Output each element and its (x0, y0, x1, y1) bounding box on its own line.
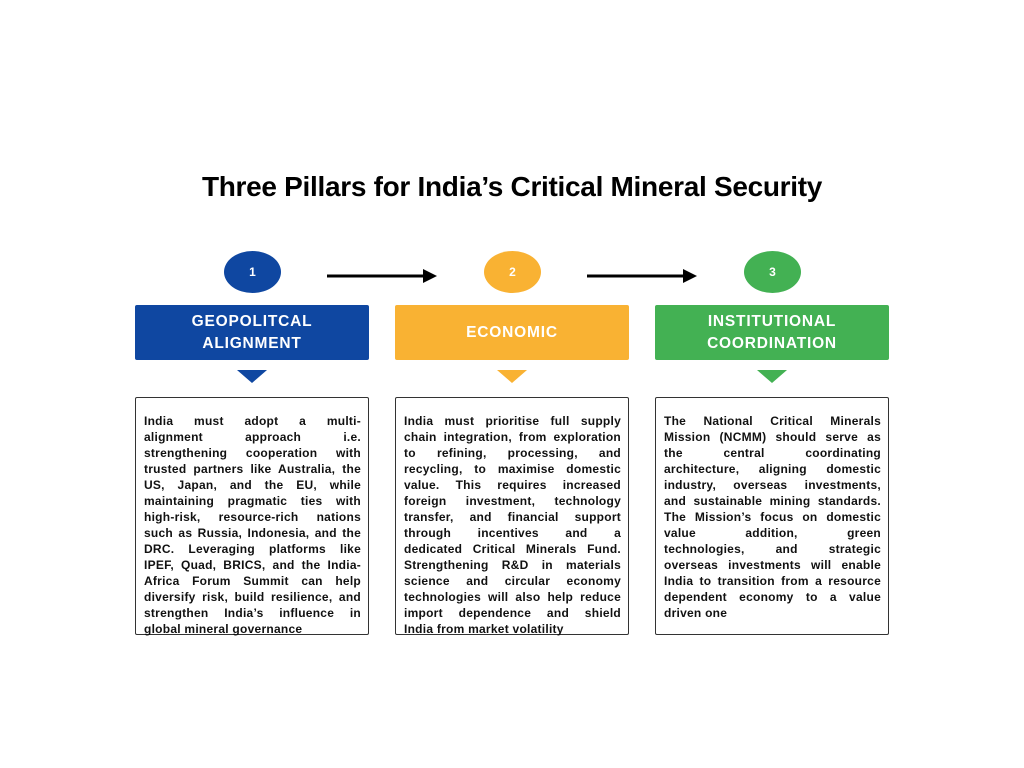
panel: economic text: India from market volatility (404, 622, 564, 636)
panel: institutional text: The Mission’s focus on domestic (664, 510, 881, 524)
panel: institutional text: driven one (664, 606, 727, 620)
panel: institutional text: architecture, aligning domestic (664, 462, 881, 476)
icon: number 2: 2 (509, 265, 516, 279)
panel: institutional text: value addition, green (664, 526, 881, 540)
panel: economic text: through incentives and a (404, 526, 621, 540)
panel: economic text (395, 397, 629, 635)
panel: economic text: chain integration, from exploration (404, 430, 621, 444)
panel: economic text: value. This requires increased (404, 478, 621, 492)
panel: institutional text: technologies, and strategic (664, 542, 881, 556)
panel: economic text: India must prioritise full supply (404, 414, 621, 428)
heading: geopolitical: GEOPOLITCAL (192, 312, 312, 330)
panel: economic text: Strengthening R&D in materials (404, 558, 621, 572)
panel: economic text: recycling, to maximise domestic (404, 462, 621, 476)
pointer 3 (757, 370, 787, 383)
icon: number 1 (224, 251, 281, 293)
panel: geopolitical text (135, 397, 369, 635)
panel: geopolitical text: global mineral governance (144, 622, 302, 636)
panel: institutional text (655, 397, 889, 635)
panel: institutional text: industry, overseas investments, (664, 478, 881, 492)
panel: economic text: foreign investment, technology (404, 494, 621, 508)
panel: economic text: science and circular economy (404, 574, 621, 588)
heading: institutional: COORDINATION (707, 334, 837, 352)
heading: economic: ECONOMIC (466, 324, 558, 340)
pointer 1 (237, 370, 267, 383)
panel: economic text: dedicated Critical Minerals Fund. (404, 542, 621, 556)
panel: institutional text: dependent economy to a value (664, 590, 881, 604)
icon: number 3: 3 (769, 265, 776, 279)
panel: geopolitical text: alignment approach i.e. (144, 430, 361, 444)
panel: geopolitical text: DRC. Leveraging platforms like (144, 542, 361, 556)
heading: institutional: INSTITUTIONAL (708, 312, 836, 330)
panel: geopolitical text: US, Japan, and the EU, while (144, 478, 361, 492)
icon: number 3 (744, 251, 801, 293)
panel: institutional text: Mission (NCMM) should serve as (664, 430, 881, 444)
panel: geopolitical text: high-risk, resource-rich nations (144, 510, 361, 524)
panel: geopolitical text: maintaining pragmatic ties with (144, 494, 361, 508)
pointer 2 (497, 370, 527, 383)
heading: institutional (655, 305, 889, 360)
panel: institutional text: the central coordinating (664, 446, 881, 460)
title: Three Pillars for India’s Critical Mineral Security (202, 171, 822, 202)
panel: economic text: technologies will also help reduce (404, 590, 621, 604)
panel: geopolitical text: such as Russia, Indonesia, and the (144, 526, 361, 540)
icon: number 2 (484, 251, 541, 293)
panel: institutional text: and sustainable mining standards. (664, 494, 881, 508)
panel: geopolitical text: strengthening cooperation with (144, 446, 361, 460)
heading: geopolitical (135, 305, 369, 360)
panel: institutional text: The National Critical Minerals (664, 414, 881, 428)
panel: geopolitical text: trusted partners like Australia, the (144, 462, 361, 476)
heading: economic (395, 305, 629, 360)
panel: geopolitical text: Africa Forum Summit can help (144, 574, 361, 588)
panel: economic text: to refining, processing, and (404, 446, 621, 460)
arrow 2 to 3 (587, 269, 697, 283)
icon: number 1: 1 (249, 265, 256, 279)
panel: geopolitical text: India must adopt a multi- (144, 414, 361, 428)
panel: geopolitical text: IPEF, Quad, BRICS, and the India- (144, 558, 361, 572)
arrow 1 to 2 (327, 269, 437, 283)
heading: geopolitical: ALIGNMENT (202, 334, 302, 352)
panel: institutional text: India to transition from a resource (664, 574, 881, 588)
panel: geopolitical text: diversify risk, build resilience, and (144, 590, 361, 604)
panel: geopolitical text: strengthen India’s influence in (144, 606, 361, 620)
panel: economic text: import dependence and shield (404, 606, 621, 620)
panel: institutional text: overseas investments will enable (664, 558, 881, 572)
panel: economic text: transfer, and financial support (404, 510, 621, 524)
